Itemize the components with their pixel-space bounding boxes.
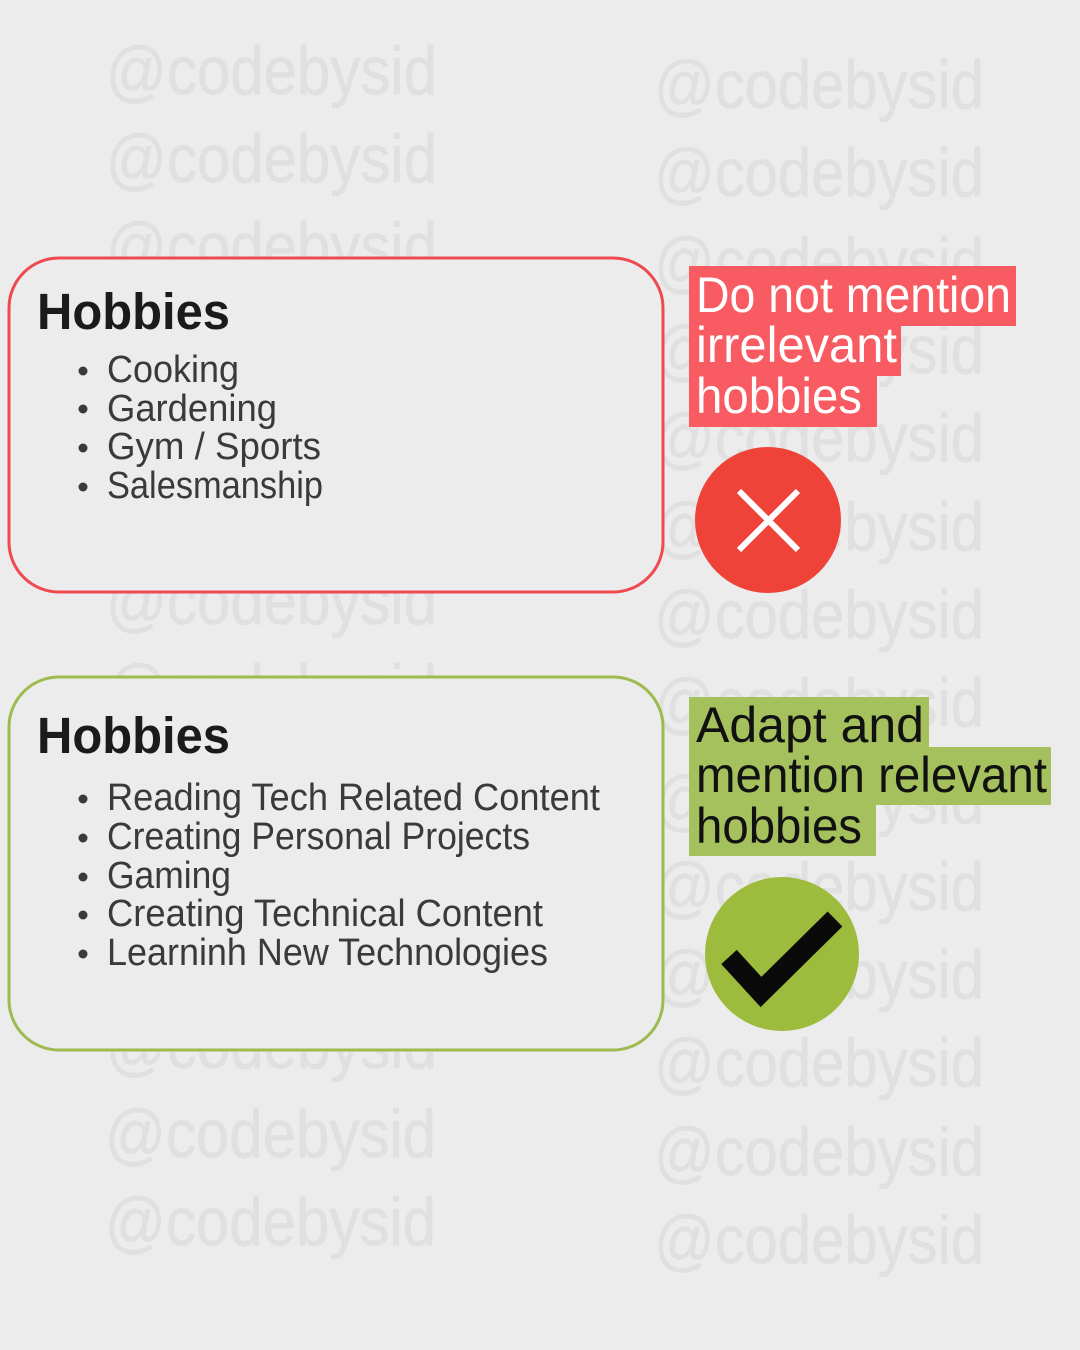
text: @codebysid [654,312,984,388]
list: relevant hobbies: Creating Technical Content [107,893,543,935]
panel: good hobbies example [9,677,663,1050]
text: @codebysid [105,1096,436,1172]
text: @codebysid [106,33,437,109]
text: @codebysid [654,849,984,925]
text: @codebysid [654,1025,984,1101]
text: @codebysid [654,489,984,565]
callout: do not mention irrelevant hobbies: Do not mention [696,267,1011,323]
callout: adapt and mention relevant hobbies: Adapt and [696,697,924,753]
list: relevant hobbies: Reading Tech Related Content [107,777,600,819]
text: @codebysid [654,1202,984,1278]
callout: adapt and mention relevant hobbies [689,697,1051,856]
list: irrelevant hobbies: Cooking [107,349,239,391]
text: @codebysid [106,1007,437,1083]
list: relevant hobbies: Gaming [107,855,231,897]
text: @codebysid [105,1184,436,1260]
panel: bad hobbies example [9,258,663,592]
list: relevant hobbies [78,777,600,974]
text: @codebysid [106,121,437,197]
callout: adapt and mention relevant hobbies: mention relevant [696,747,1047,803]
list: irrelevant hobbies: Gym / Sports [107,426,321,468]
callout: adapt and mention relevant hobbies: hobbies [696,798,862,854]
list: irrelevant hobbies: Gardening [107,388,277,430]
callout: do not mention irrelevant hobbies: hobbies [696,368,862,424]
list: relevant hobbies: Learninh New Technologies [107,932,548,974]
text: @codebysid [654,762,984,838]
text: @codebysid [654,665,984,741]
list: irrelevant hobbies: Salesmanship [107,465,323,507]
text: @codebysid [654,1114,984,1190]
text: @codebysid [654,224,984,300]
text: @codebysid [654,400,984,476]
list: irrelevant hobbies [78,349,323,507]
text: @codebysid [654,47,984,123]
text: @codebysid [654,135,984,211]
icon: green check mark [705,877,859,1031]
callout: do not mention irrelevant hobbies: irrelevant [696,317,897,373]
text: @codebysid [106,651,437,727]
callout: do not mention irrelevant hobbies [689,266,1016,427]
list: relevant hobbies: Creating Personal Projects [107,816,530,858]
text: @codebysid [106,563,437,639]
text: @codebysid [654,937,984,1013]
heading: good example Hobbies: Hobbies [37,707,230,764]
heading: bad example Hobbies: Hobbies [37,283,230,340]
text: @codebysid [654,577,984,653]
icon: red cross [695,447,841,593]
text: @codebysid [106,209,437,285]
